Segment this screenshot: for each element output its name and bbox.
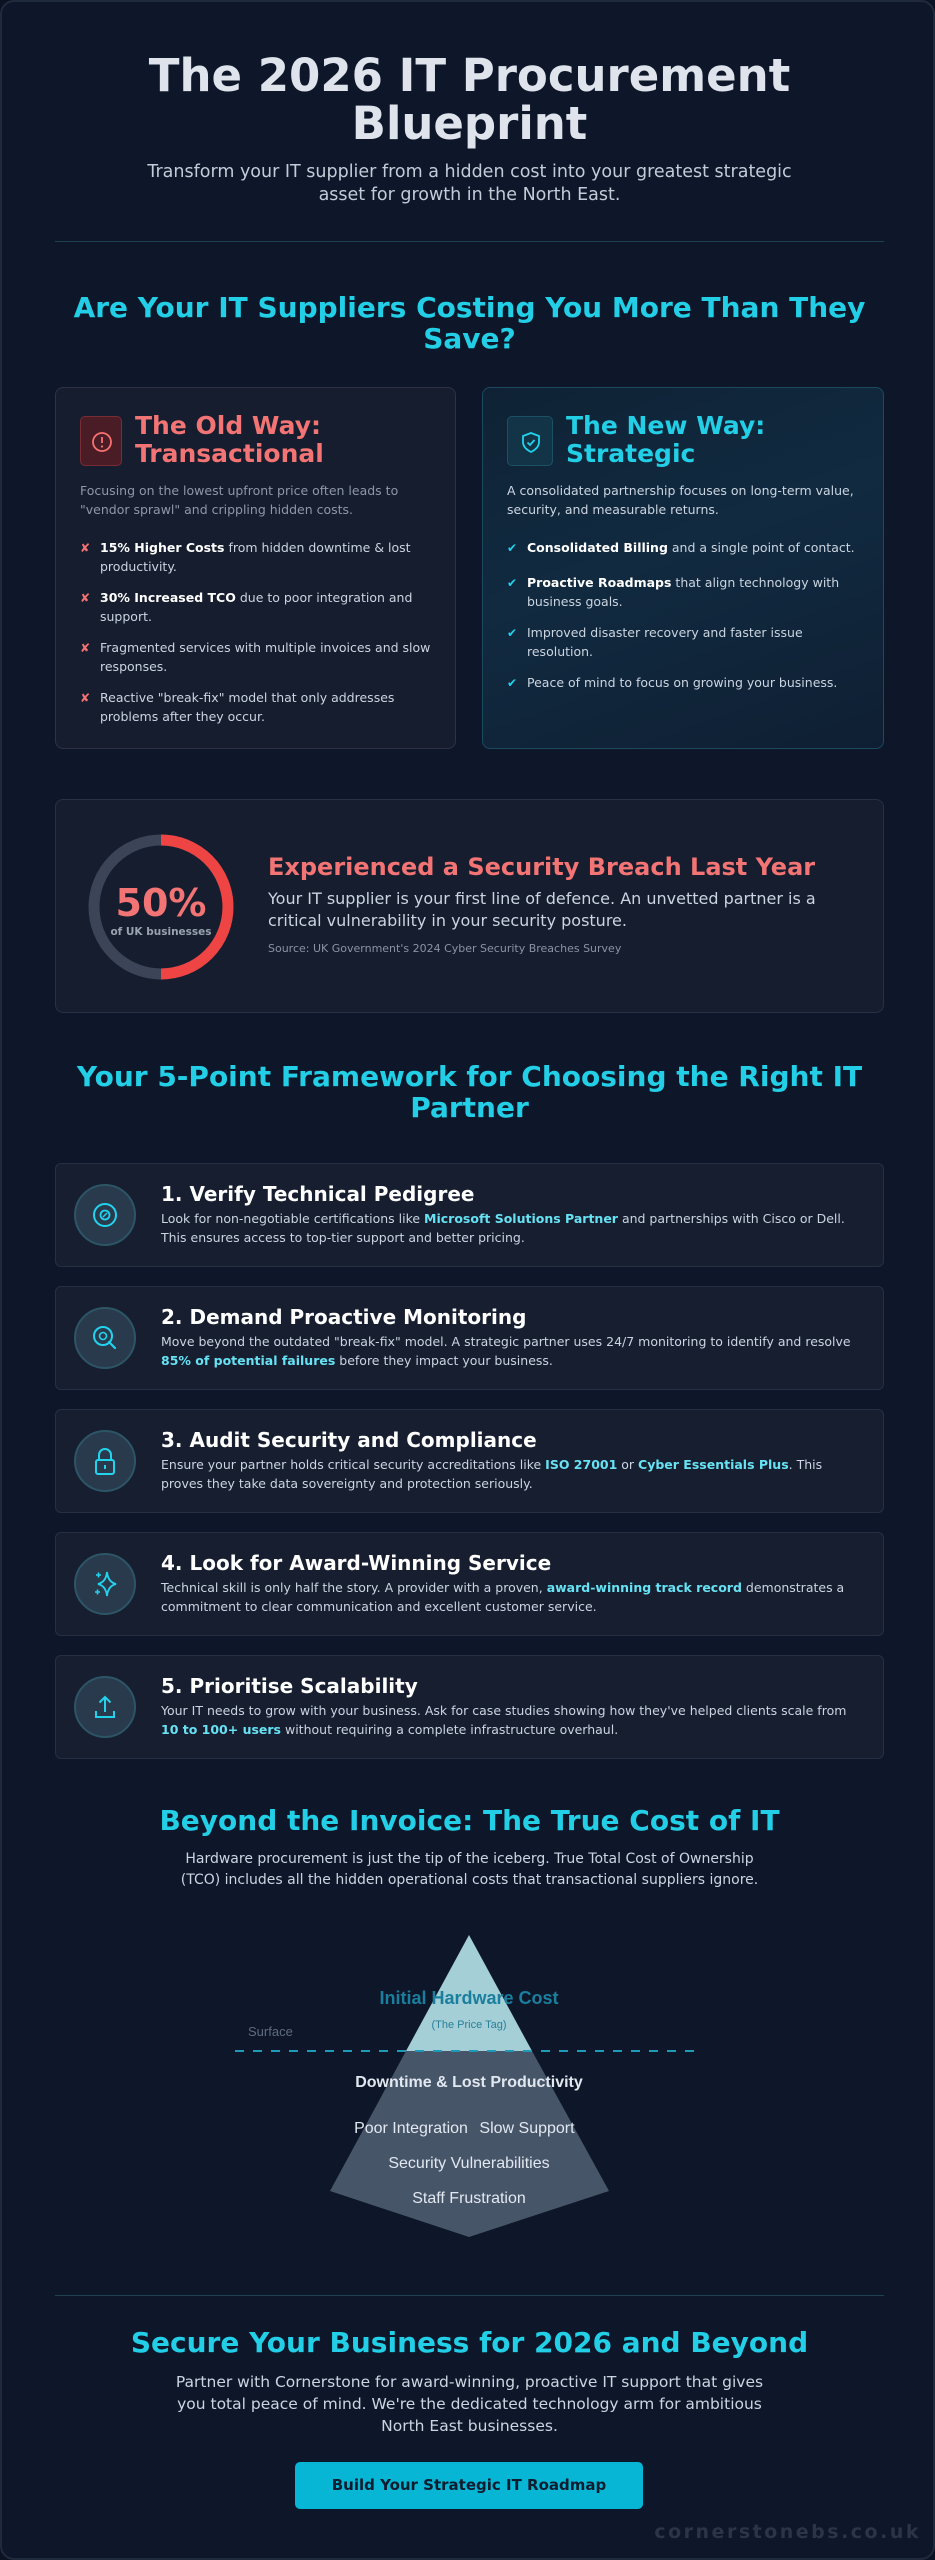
- text: new way intro: A consolidated partnership focuses on long-term value, security, and measurable returns.: [507, 483, 854, 517]
- list: new way: ✔: [507, 676, 517, 690]
- icon: sparkle: [74, 1553, 136, 1615]
- footer: website: cornerstonebs.co.uk: [654, 2521, 921, 2543]
- heading: old way: Transactional: [135, 439, 324, 468]
- list: new way: ✔: [507, 626, 517, 640]
- icon: alert: [80, 416, 122, 466]
- chart: iceberg: (The Price Tag): [432, 2019, 506, 2031]
- list: new way: Improved disaster recovery and faster issue resolution.: [527, 625, 803, 659]
- subtitle: asset for growth in the North East.: [319, 185, 620, 205]
- panel: step 5: [55, 1655, 884, 1759]
- title: [148, 49, 790, 150]
- panel: step 1: [55, 1163, 884, 1267]
- chart: iceberg: Initial Hardware Cost: [379, 1988, 559, 2008]
- panel: new way: [482, 387, 884, 749]
- list: new way: Proactive Roadmaps that align technology with business goals.: [527, 575, 839, 609]
- list: old way: ✘: [80, 691, 90, 705]
- panel: step 3: 3. Audit Security and Compliance: [161, 1428, 537, 1452]
- heading: costing more: Are Your IT Suppliers Costing You More Than They Save?: [74, 291, 865, 355]
- heading: CTA: Secure Your Business for 2026 and Beyond: [131, 2326, 808, 2359]
- chart: 50% ring: of UK businesses: [110, 926, 212, 938]
- chart: 50% ring: [88, 834, 234, 980]
- chart: iceberg: [235, 1935, 694, 2237]
- list: old way: ✘: [80, 541, 90, 555]
- list: old way: 30% Increased TCO due to poor integration and support.: [100, 590, 412, 624]
- heading: old way: The Old Way:: [135, 411, 321, 440]
- panel: step 4: [55, 1532, 884, 1636]
- heading: old way: [135, 411, 324, 468]
- chart: iceberg: Security Vulnerabilities: [388, 2155, 550, 2172]
- chart: iceberg: Staff Frustration: [412, 2190, 526, 2207]
- list: new way: Peace of mind to focus on growing your business.: [527, 675, 837, 690]
- text: true cost intro: Hardware procurement is just the tip of the iceberg. True Total Cost of Ownership (TCO) includes all the hidden operational costs that transactional suppliers ignore.: [181, 1851, 758, 1888]
- chart: iceberg: Downtime & Lost Productivity: [355, 2074, 583, 2091]
- list: new way: [507, 540, 855, 690]
- panel: step 5: Your IT needs to grow with your business. Ask for case studies showing how they've helped clients scale from 10 to 100+ users without requiring a complete infrastructure overhaul.: [161, 1703, 846, 1737]
- panel: step 3: Ensure your partner holds critical security accreditations like ISO 27001 or Cyber Essentials Plus. This proves they take data sovereignty and protection seriously.: [161, 1457, 822, 1491]
- panel: step 2: Move beyond the outdated "break-fix" model. A strategic partner uses 24/7 monitoring to identify and resolve 85% of potential failures before they impact your business.: [161, 1334, 851, 1368]
- text: CTA body: Partner with Cornerstone for award-winning, proactive IT support that gives you total peace of mind. We're the dedicated technology arm for ambitious North East businesses.: [176, 2373, 763, 2435]
- chart: iceberg: Slow Support: [479, 2120, 575, 2137]
- list: new way: ✔: [507, 576, 517, 590]
- title: The 2026 IT Procurement: [149, 49, 790, 102]
- panel: step 1: 1. Verify Technical Pedigree: [161, 1182, 474, 1206]
- list: old way: 15% Higher Costs from hidden downtime & lost productivity.: [100, 540, 411, 574]
- panel: step 2: 2. Demand Proactive Monitoring: [161, 1305, 526, 1329]
- list: old way: [80, 540, 430, 724]
- heading: true cost: Beyond the Invoice: The True Cost of IT: [159, 1804, 780, 1837]
- list: old way: ✘: [80, 641, 90, 655]
- list: new way: ✔: [507, 541, 517, 555]
- icon: badge: [74, 1184, 136, 1246]
- chart: 50% ring: 50%: [116, 881, 206, 925]
- panel: step 5: 5. Prioritise Scalability: [161, 1674, 418, 1698]
- subtitle: [147, 162, 792, 205]
- panel: old way: [55, 387, 456, 749]
- list: old way: Reactive "break-fix" model that only addresses problems after they occur.: [100, 690, 394, 724]
- title: Blueprint: [352, 97, 587, 150]
- list: old way: ✘: [80, 591, 90, 605]
- icon: search: [74, 1307, 136, 1369]
- panel: step 2: [55, 1286, 884, 1390]
- button: CTA: [295, 2462, 643, 2509]
- heading: breach: Experienced a Security Breach Last Year: [268, 853, 815, 881]
- heading: framework: Your 5-Point Framework for Choosing the Right IT Partner: [77, 1060, 862, 1124]
- panel: step 4: 4. Look for Award-Winning Service: [161, 1551, 551, 1575]
- panel: step 4: Technical skill is only half the story. A provider with a proven, award-winning track record demonstrates a commitment to clear communication and excellent customer service.: [161, 1580, 844, 1614]
- button: CTA: Build Your Strategic IT Roadmap: [332, 2476, 606, 2494]
- subtitle: Transform your IT supplier from a hidden cost into your greatest strategic: [147, 162, 792, 182]
- text: breach body: Your IT supplier is your first line of defence. An unvetted partner is a critical vulnerability in your security posture.: [268, 889, 816, 930]
- chart: iceberg: Surface: [248, 2024, 293, 2039]
- icon: lock: [74, 1430, 136, 1492]
- heading: new way: Strategic: [566, 439, 695, 468]
- list: new way: Consolidated Billing and a single point of contact.: [527, 540, 855, 555]
- icon: upload: [74, 1676, 136, 1738]
- heading: new way: [566, 411, 765, 468]
- text: old way intro: Focusing on the lowest upfront price often leads to "vendor sprawl" and crippling hidden costs.: [80, 483, 398, 517]
- chart: iceberg: Poor Integration: [354, 2120, 468, 2137]
- panel: step 1: Look for non-negotiable certifications like Microsoft Solutions Partner and partnerships with Cisco or Dell. This ensures access to top-tier support and better pricing.: [161, 1211, 845, 1245]
- heading: new way: The New Way:: [566, 411, 765, 440]
- panel: security stat: [55, 799, 884, 1013]
- text: source: Source: UK Government's 2024 Cyber Security Breaches Survey: [268, 942, 621, 955]
- list: old way: Fragmented services with multiple invoices and slow responses.: [100, 640, 430, 674]
- panel: step 3: [55, 1409, 884, 1513]
- icon: shield: [507, 416, 553, 466]
